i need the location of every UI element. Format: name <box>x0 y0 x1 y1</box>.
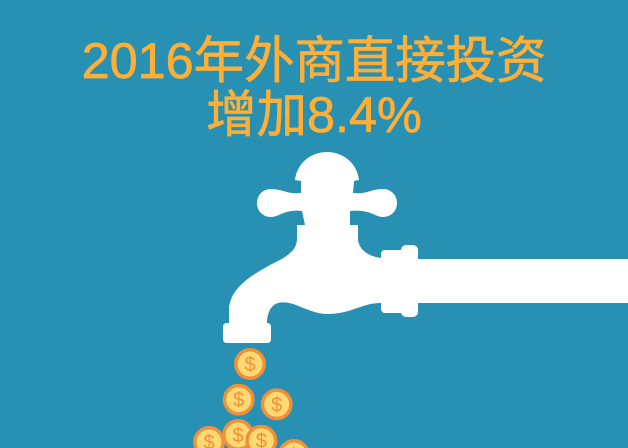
pipe <box>410 259 628 303</box>
coin 1: $ <box>244 354 256 376</box>
icon: coins <box>195 350 308 448</box>
coin 3: $ <box>271 394 282 416</box>
title <box>82 32 546 143</box>
title: 增加8.4% <box>206 86 422 143</box>
icon: faucet <box>223 152 628 343</box>
title: 2016年外商直接投资 <box>82 32 546 89</box>
coin 5: $ <box>232 425 244 447</box>
nozzle <box>223 323 271 343</box>
coin 2: $ <box>233 390 244 412</box>
pipe collar <box>381 250 405 313</box>
